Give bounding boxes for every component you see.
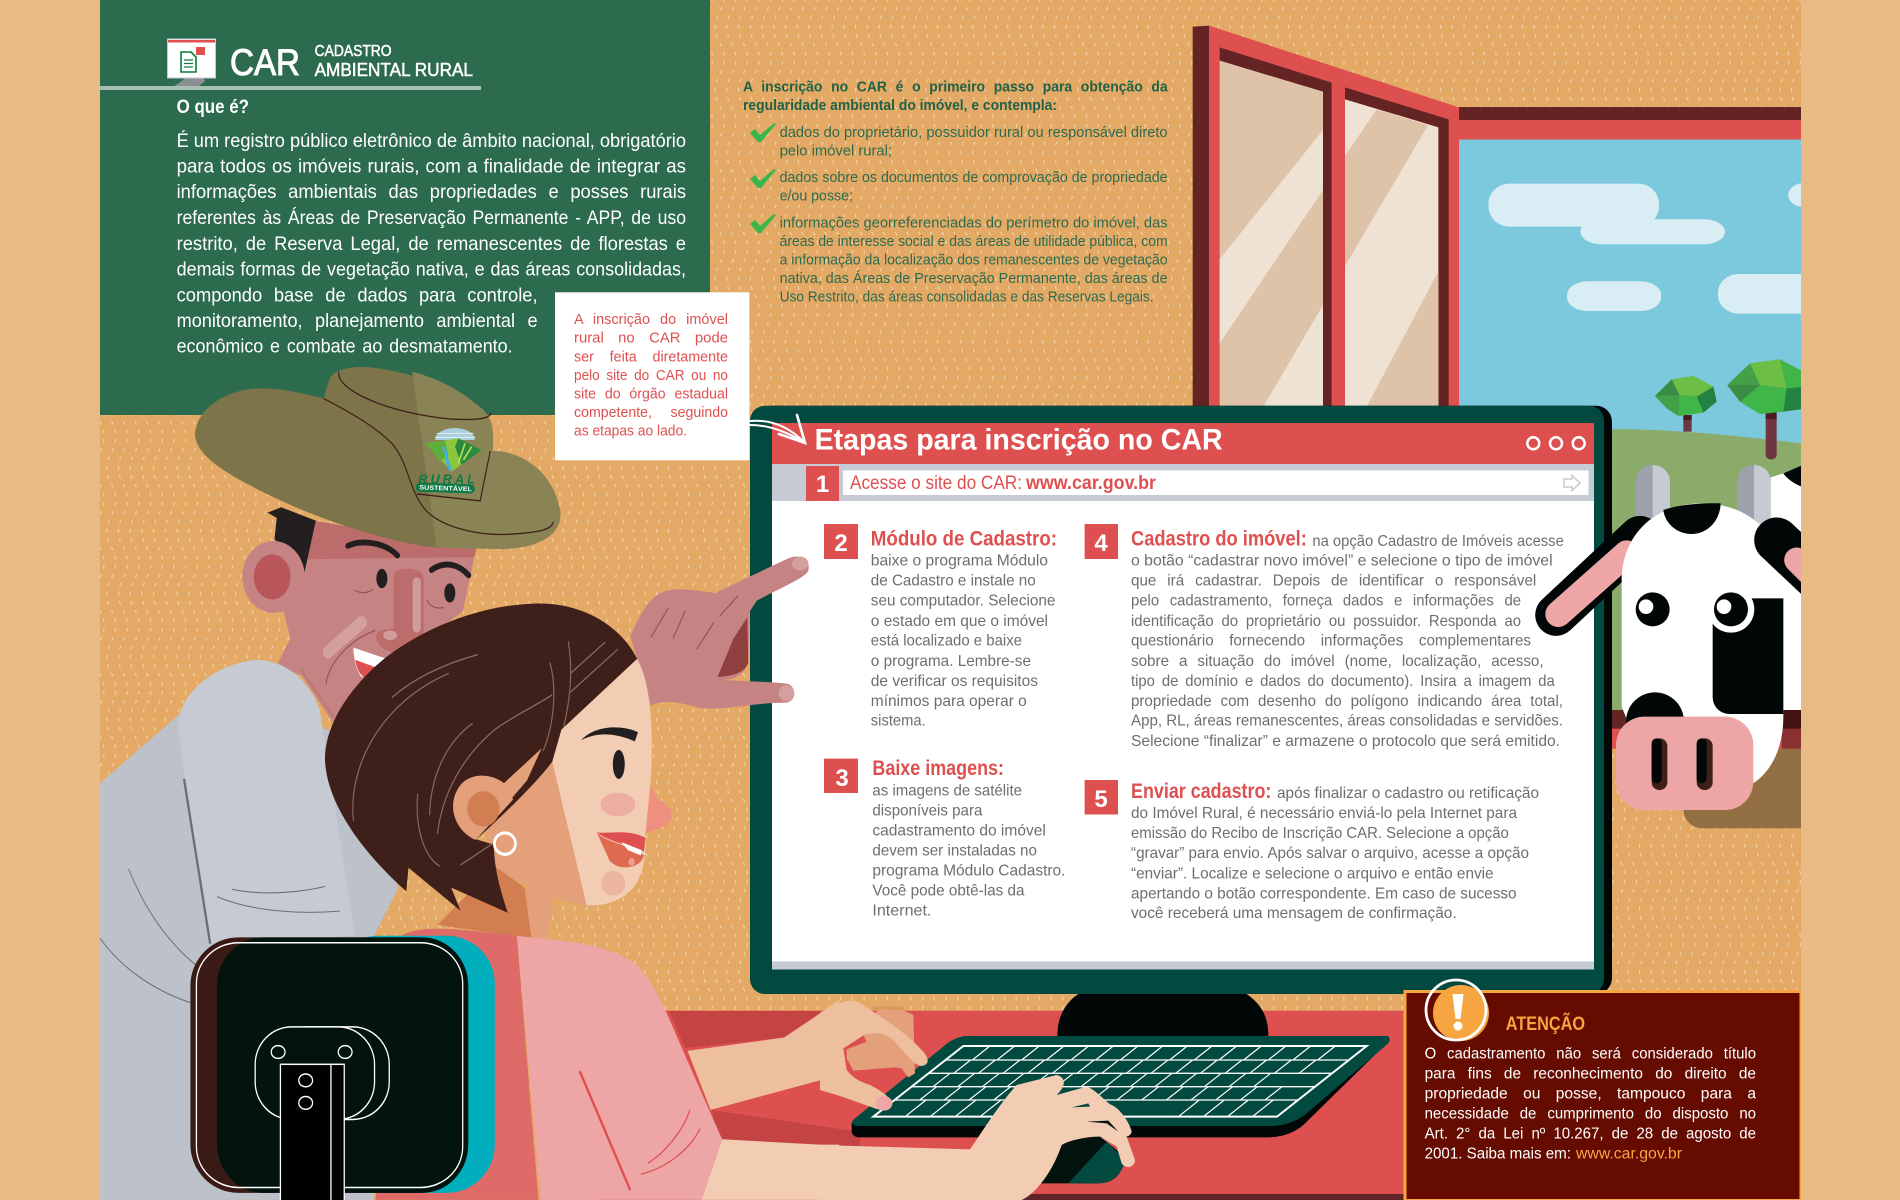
right ear xyxy=(1777,540,1833,593)
facial features xyxy=(348,543,397,555)
window frame and glass xyxy=(1193,26,1459,407)
text block: CAR contents list: nativa, das Áreas de Preservação Permanente, das áreas de xyxy=(780,270,1168,287)
text block: O que é?: restrito, de Reserva Legal, de remanescentes de florestas e xyxy=(177,233,686,255)
step 1 address bar xyxy=(772,464,1594,501)
step 2: de verificar os requisitos xyxy=(871,673,1038,690)
step 2: mínimos para operar o xyxy=(871,693,1027,710)
icon: computer with document xyxy=(168,39,216,87)
step 4: na opção Cadastro de Imóveis acesse xyxy=(1312,533,1564,550)
step 4: sobre a situação do imóvel (nome, localização, acesso, xyxy=(1131,653,1544,670)
illustration: hands and mouse xyxy=(820,1001,1135,1200)
step 2: 2 xyxy=(834,530,848,557)
step 5: Enviar cadastro: xyxy=(1131,780,1271,803)
step 1 address bar: 1 xyxy=(816,471,829,498)
callout: white note: A inscrição do imóvel xyxy=(574,312,728,328)
step 2 xyxy=(824,524,1057,729)
blouse xyxy=(375,929,538,1200)
hat xyxy=(195,367,561,549)
panel: attention box: www.car.gov.br xyxy=(1575,1145,1682,1162)
text block: CAR contents list: áreas de interesse social e das áreas de utilidade pública, com xyxy=(780,234,1168,250)
step 2: sistema. xyxy=(871,712,926,729)
hand on mouse xyxy=(820,1075,1135,1200)
step 2: está localizado e baixe xyxy=(871,633,1022,650)
callout: white note: pelo site do CAR ou no xyxy=(574,368,728,384)
clouds xyxy=(1488,183,1844,314)
mouth xyxy=(597,832,644,867)
panel: attention box: propriedade ou posse, tampouco para a xyxy=(1425,1085,1756,1102)
text block: O que é?: econômico e combate ao desmatamento. xyxy=(177,336,513,358)
head xyxy=(1622,503,1783,785)
text block: CAR contents list: dados do proprietário, possuidor rural ou responsável direto xyxy=(780,125,1168,141)
icon: check 2 xyxy=(750,169,776,188)
step 3: programa Módulo Cadastro. xyxy=(872,863,1066,880)
browser title bar xyxy=(772,423,1594,464)
step 4: tipo de domínio e dados do documento). Insira a imagem da xyxy=(1131,673,1555,690)
arrow: callout to steps xyxy=(750,415,805,443)
step 2: o programa. Lembre-se xyxy=(871,653,1031,670)
step 2: baixe o programa Módulo xyxy=(871,552,1048,569)
panel: attention box: para fins de reconhecimento do direito de xyxy=(1425,1065,1756,1082)
illustration: woman at computer xyxy=(325,603,839,1200)
step 5: emissão do Recibo de Inscrição CAR. Selecione a opção xyxy=(1131,825,1509,842)
illustration: man in hat pointing xyxy=(100,367,809,1200)
sky xyxy=(1459,139,1801,714)
desk xyxy=(600,1011,1404,1200)
icon: check 3 xyxy=(750,214,776,233)
heading: CAR logo and title xyxy=(100,39,481,90)
face patch and eyes xyxy=(1713,598,1783,714)
step 4: Cadastro do imóvel: xyxy=(1131,527,1307,550)
hand on keys xyxy=(873,1007,903,1010)
text block: CAR contents list: dados sobre os documentos de comprovação de propriedade xyxy=(780,170,1168,186)
horns xyxy=(1636,465,1653,520)
text block: CAR contents list: e/ou posse; xyxy=(780,189,853,205)
logo: Rural Sustentável hat badge: SUSTENTÁVEL xyxy=(419,482,472,493)
text block: CAR contents list: pelo imóvel rural; xyxy=(780,143,892,159)
text block: O que é?: para todos os imóveis rurais, com a finalidade de integrar as xyxy=(177,156,686,178)
text block: CAR contents list: a informação da localização dos remanescentes de vegetação xyxy=(780,253,1168,269)
icon: check 1 xyxy=(750,123,776,142)
face shade xyxy=(486,751,587,905)
monitor frame xyxy=(750,406,1612,994)
step 3 xyxy=(824,757,1066,920)
monitor with registration steps xyxy=(750,406,1612,994)
step 4: 4 xyxy=(1094,530,1108,557)
step 5: você receberá uma mensagem de confirmação. xyxy=(1131,905,1457,922)
face xyxy=(552,659,652,905)
heading: CAR logo and title: CAR xyxy=(230,42,300,83)
callout: white note xyxy=(555,292,749,460)
callout: white note: ser feita diretamente xyxy=(574,349,728,365)
callout: white note: site do órgão estadual xyxy=(574,386,728,402)
step 4: o botão “cadastrar novo imóvel” e selecione o tipo de imóvel xyxy=(1131,553,1553,570)
text block: O que é?: O que é? xyxy=(177,96,249,118)
text block: CAR contents list xyxy=(743,80,1169,306)
step 3: as imagens de satélite xyxy=(872,782,1022,799)
text block: O que é?: É um registro público eletrônico de âmbito nacional, obrigatório xyxy=(177,129,686,152)
arms xyxy=(688,1000,839,1110)
ear xyxy=(463,748,542,839)
step 2: de Cadastro e instale no xyxy=(871,573,1036,590)
nose xyxy=(644,778,671,834)
step 5 xyxy=(1085,780,1539,922)
step 4: que irá cadastrar. Depois de identificar o responsável xyxy=(1131,573,1536,590)
step 4: propriedade com desenho do polígono indicando área total, xyxy=(1131,693,1563,710)
step 5: “enviar”. Localize e selecione o arquivo e então envie xyxy=(1131,865,1494,882)
step 5: após finalizar o cadastro ou retificação xyxy=(1277,785,1539,802)
text block: O que é? xyxy=(177,96,686,358)
snout xyxy=(1616,717,1753,810)
step 3: 3 xyxy=(835,765,849,792)
shirt xyxy=(100,713,398,1200)
hand pointing xyxy=(630,556,809,709)
text block: O que é?: compondo base de dados para controle, xyxy=(177,284,538,306)
callout: white note: competente, seguindo xyxy=(574,405,728,421)
panel: attention box: ATENÇÃO xyxy=(1506,1013,1585,1035)
step 3: cadastramento do imóvel xyxy=(872,822,1046,840)
step 4: Selecione “finalizar” e armazene o protocolo que será emitido. xyxy=(1131,733,1560,750)
callout: white note: rural no CAR pode xyxy=(574,331,728,347)
eyebrow and eye xyxy=(581,727,638,741)
text block: CAR contents list: Uso Restrito, das áreas consolidadas e das Reservas Legais. xyxy=(780,290,1154,306)
text block: O que é?: demais formas de vegetação nativa, e das áreas consolidadas, xyxy=(177,258,686,280)
heading: CAR logo and title: AMBIENTAL RURAL xyxy=(315,60,473,80)
callout: white note: as etapas ao lado. xyxy=(574,424,687,440)
hair xyxy=(325,603,637,913)
text block: CAR contents list: informações georreferenciadas do perímetro do imóvel, das xyxy=(780,215,1168,231)
neck xyxy=(437,866,532,938)
illustration: cow xyxy=(1556,463,1833,810)
step 4: App, RL, áreas remanescentes, áreas consolidadas e servidões. xyxy=(1131,713,1563,730)
text block: O que é?: informações ambientais das propriedades e posses rurais xyxy=(177,181,686,203)
earring xyxy=(494,833,515,854)
step 4: identificação do proprietário ou possuidor. Responda ao xyxy=(1131,613,1521,630)
step 4: questionário fornecendo informações complementares xyxy=(1131,633,1531,650)
hair strands xyxy=(392,655,478,697)
step 1 address bar: www.car.gov.br xyxy=(1025,473,1157,494)
hill, trees and window sill xyxy=(1612,359,1807,828)
illustration: office chair xyxy=(190,936,495,1200)
sleeve xyxy=(178,660,355,944)
neck and face xyxy=(277,521,476,724)
logo: Rural Sustentável hat badge: RURAL xyxy=(418,472,475,486)
step 3: Você pode obtê-las da xyxy=(872,883,1025,900)
step 3: devem ser instaladas no xyxy=(872,842,1037,859)
monitor stand xyxy=(1057,994,1268,1036)
panel: attention box: Art. 2° da Lei nº 10.267, de 28 de agosto de xyxy=(1425,1125,1756,1142)
illustration: keyboard xyxy=(852,1036,1390,1137)
step 2: seu computador. Selecione xyxy=(871,592,1055,610)
left ear xyxy=(1556,537,1640,615)
body xyxy=(1771,466,1807,710)
hair and ear xyxy=(268,507,316,580)
step 3: disponíveis para xyxy=(872,803,982,820)
browser title bar: Etapas para inscrição no CAR xyxy=(815,424,1223,457)
step 5: apertando o botão correspondente. Em caso de sucesso xyxy=(1131,885,1517,902)
text block: O que é?: referentes às Áreas de Preservação Permanente - APP, de uso xyxy=(177,206,686,229)
heading: CAR logo and title: CADASTRO xyxy=(315,43,392,60)
step 5: “gravar” para envio. Após salvar o arquivo, acesse a opção xyxy=(1131,845,1529,862)
mouse xyxy=(1040,1137,1124,1183)
step 2: Módulo de Cadastro: xyxy=(871,527,1057,550)
panel: attention box: necessidade de cumprimento do disposto no xyxy=(1425,1105,1756,1122)
step 1 address bar: Acesse o site do CAR: xyxy=(850,473,1022,494)
text block: CAR contents list: A inscrição no CAR é o primeiro passo para obtenção da xyxy=(743,80,1169,96)
text block: CAR contents list: regularidade ambiental do imóvel, e contempla: xyxy=(743,98,1057,114)
illustration: window with sky and landscape xyxy=(1193,26,1844,828)
panel: attention box: O cadastramento não será considerado título xyxy=(1425,1045,1756,1062)
step 2: o estado em que o imóvel xyxy=(871,613,1048,630)
panel: attention box: 2001. Saiba mais em: xyxy=(1425,1145,1571,1162)
step 4 xyxy=(1085,524,1564,750)
step 5: do Imóvel Rural, é necessário enviá-lo pela Internet para xyxy=(1131,805,1517,822)
step 3: Baixe imagens: xyxy=(872,757,1004,780)
step 4: pelo cadastramento, forneça dados e informações de xyxy=(1131,592,1521,610)
logo: Rural Sustentável hat badge xyxy=(416,428,482,494)
panel: attention box xyxy=(1405,980,1801,1200)
icon: exclamation xyxy=(1426,980,1489,1041)
text block: O que é?: monitoramento, planejamento ambiental e xyxy=(177,310,538,332)
step 5: 5 xyxy=(1094,786,1108,813)
panel: green intro panel background xyxy=(100,0,710,415)
step 3: Internet. xyxy=(872,902,931,920)
